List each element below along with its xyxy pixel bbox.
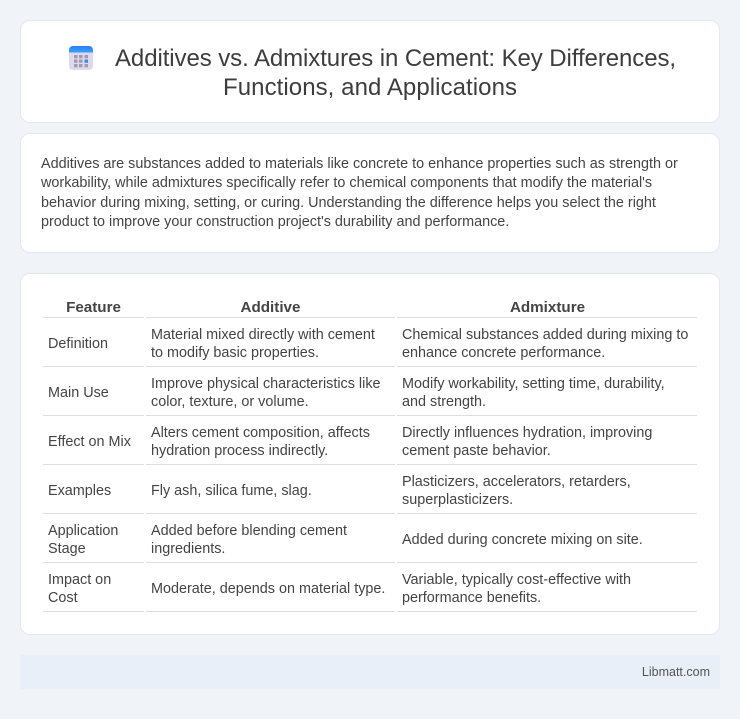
row: application stage: Added before blending cement <box>151 523 347 539</box>
row: impact on cost: Variable, typically cost-effective with <box>402 572 631 588</box>
comparison table panel <box>20 273 720 635</box>
row: main use: Main Use <box>48 385 109 401</box>
row: effect on mix: Effect on Mix <box>48 434 131 450</box>
title: Additives vs. Admixtures in Cement: Key Differences, <box>115 45 676 72</box>
row: application stage: Stage <box>48 541 86 557</box>
row: main use: Improve physical characteristics like <box>151 376 381 392</box>
row: main use: Modify workability, setting time, durability, <box>402 376 665 392</box>
row: examples: superplasticizers. <box>402 492 513 508</box>
row: definition: Material mixed directly with cement <box>151 327 375 343</box>
row: effect on mix <box>48 425 652 459</box>
row: application stage: Added during concrete mixing on site. <box>402 532 643 548</box>
row: examples: Plasticizers, accelerators, retarders, <box>402 474 631 490</box>
intro text: workability, while admixtures specifically refer to chemical components that modify the material's <box>41 175 652 191</box>
table header: Admixture <box>510 299 585 316</box>
row: examples <box>48 474 631 508</box>
table header: Additive <box>241 299 300 316</box>
row: impact on cost <box>48 572 631 606</box>
row: definition: to modify basic properties. <box>151 345 319 361</box>
row: impact on cost: performance benefits. <box>402 590 541 606</box>
row: impact on cost: Moderate, depends on material type. <box>151 581 385 597</box>
row: effect on mix: Directly influences hydration, improving <box>402 425 652 441</box>
row: effect on mix: hydration process indirectly. <box>151 443 328 459</box>
footer bar <box>20 655 720 689</box>
row: impact on cost: Impact on <box>48 572 111 588</box>
row: application stage <box>48 523 643 557</box>
intro text <box>41 156 678 230</box>
row: definition <box>48 327 688 361</box>
icon: calendar grid <box>69 46 93 70</box>
row: application stage: Application <box>48 523 118 539</box>
row: examples: Fly ash, silica fume, slag. <box>151 483 312 499</box>
row: effect on mix: Alters cement composition, affects <box>151 425 370 441</box>
row: examples: Examples <box>48 483 111 499</box>
row: definition: Chemical substances added during mixing to <box>402 327 688 343</box>
intro panel <box>20 133 720 253</box>
intro text: Additives are substances added to materials like concrete to enhance properties such as strength or <box>41 156 678 172</box>
footer text: Libmatt.com <box>642 665 710 679</box>
row: application stage: ingredients. <box>151 541 225 557</box>
row: effect on mix: cement paste behavior. <box>402 443 551 459</box>
row: impact on cost: Cost <box>48 590 78 606</box>
table header: Feature <box>66 299 121 316</box>
row: definition: Definition <box>48 336 108 352</box>
intro text: behavior during mixing, setting, or curing. Understanding the difference helps you select the right <box>41 194 656 210</box>
intro text: product to improve your construction project's durability and performance. <box>41 214 509 230</box>
row: main use <box>48 376 665 410</box>
row: main use: color, texture, or volume. <box>151 394 309 410</box>
table header <box>66 299 585 316</box>
row: definition: enhance concrete performance. <box>402 345 605 361</box>
title <box>115 45 676 101</box>
header card <box>20 20 720 123</box>
row: main use: and strength. <box>402 394 486 410</box>
title: Functions, and Applications <box>223 74 517 101</box>
